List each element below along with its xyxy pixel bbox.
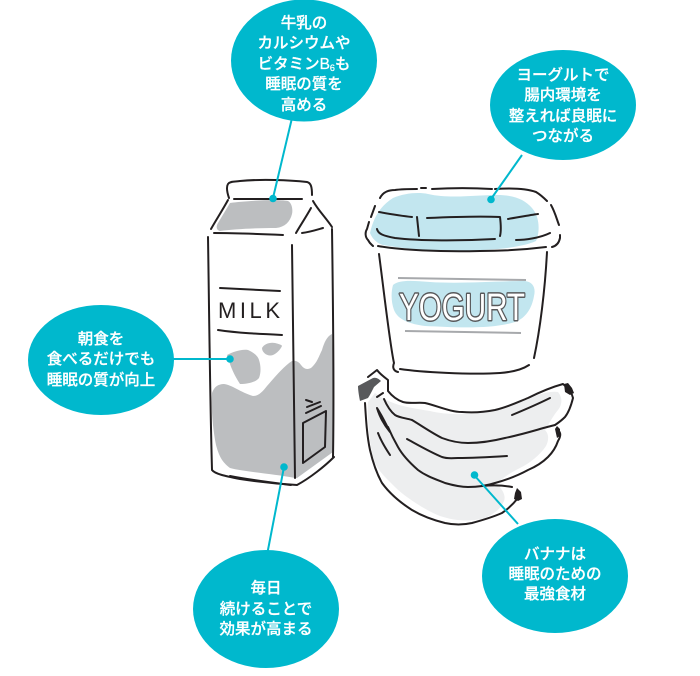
callout: banana: バナナは <box>524 546 586 563</box>
illustration: bananas <box>358 370 574 524</box>
connector: milk top <box>269 118 292 202</box>
callout: milk calcium: 高める <box>281 96 327 114</box>
callout: milk calcium: 6 <box>330 63 335 73</box>
callout: breakfast: 睡眠の質が向上 <box>47 370 155 389</box>
callout: every day: 続けることで <box>220 600 312 618</box>
callout: breakfast: 食べるだけでも <box>47 350 155 368</box>
callout: banana: 最強食材 <box>524 585 586 603</box>
connector: breakfast <box>172 355 234 363</box>
cup body <box>379 254 529 374</box>
carton outline <box>227 180 312 198</box>
callout: every day <box>193 550 339 668</box>
callout: yogurt <box>490 50 636 160</box>
callout: breakfast: 朝食を <box>78 330 124 348</box>
yogurt label lines <box>398 278 526 333</box>
callout: yogurt: つながる <box>532 126 594 145</box>
callout: milk calcium: 牛乳の <box>281 14 327 32</box>
banana tips <box>514 383 574 501</box>
illustration: yogurt cup <box>366 188 560 374</box>
connector: banana <box>471 471 518 524</box>
banana fill <box>368 392 561 520</box>
connector: yogurt <box>487 155 522 203</box>
connector: every day <box>267 463 288 555</box>
callout: banana <box>482 519 628 633</box>
milk label text: MILK <box>218 298 280 323</box>
illustration: milk carton <box>208 180 334 485</box>
banana outlines <box>368 370 573 425</box>
callout: milk calcium: ビタミンB <box>258 56 330 73</box>
callout: milk calcium <box>231 0 377 122</box>
lid outline <box>371 188 559 225</box>
yogurt label text: YOGURT <box>399 287 525 329</box>
callout: breakfast <box>28 305 174 415</box>
callout: milk calcium: カルシウムや <box>257 34 351 52</box>
callout: milk calcium: 睡眠の質を <box>265 75 343 93</box>
blue label fill <box>392 281 535 327</box>
blue lid fill <box>370 193 539 251</box>
milk gray patches <box>212 200 333 478</box>
banana stem <box>358 378 381 401</box>
callout: banana: 睡眠のための <box>508 565 602 583</box>
callout: yogurt: 腸内環境を <box>524 86 602 104</box>
callout: yogurt: 整えれば良眠に <box>509 107 617 125</box>
callout: milk calcium: も <box>335 55 350 73</box>
callout: yogurt: ヨーグルトで <box>516 66 610 84</box>
callout: every day: 効果が高まる <box>219 619 313 638</box>
callout: every day: 毎日 <box>250 579 282 597</box>
milk label lines <box>218 288 282 335</box>
carton side panel <box>303 411 326 463</box>
